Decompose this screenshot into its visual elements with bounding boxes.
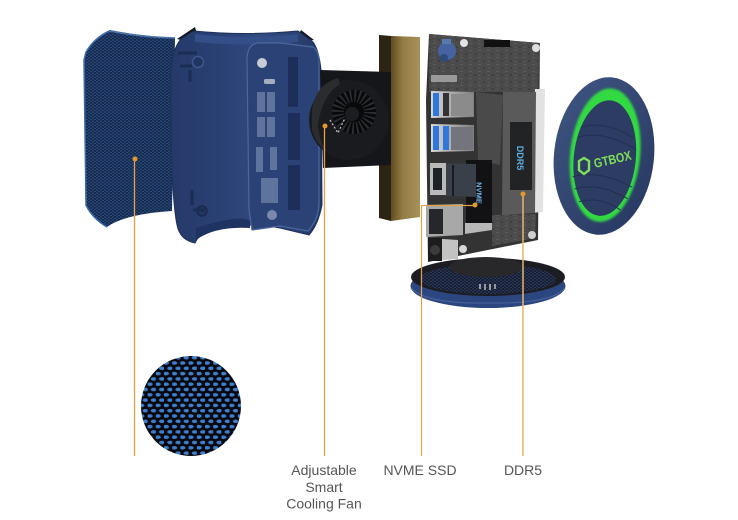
base puck [410,257,566,308]
front LED disc with logo [546,72,662,240]
label: DDR5: DDR5 [504,462,542,478]
power jack [428,238,458,261]
ethernet port [426,204,463,237]
label: Adjustable Smart Cooling Fan: Smart [305,479,343,495]
label: Adjustable Smart Cooling Fan: Cooling Fan [286,496,362,512]
USB ports [431,91,474,152]
heatsink [379,35,420,221]
stacked port [430,163,476,197]
label: Adjustable Smart Cooling Fan: Adjustable [291,462,357,478]
NVMe SSD: NVME [474,182,484,204]
mesh texture swatch [141,356,241,456]
CMOS battery screw [438,39,456,62]
leader line: DDR5 [520,192,526,456]
leader line: cooling fan [322,124,328,456]
leader line: mesh cover [132,156,138,456]
DDR5 memory module: DDR5 [515,146,525,170]
GTBOX logo [579,148,633,174]
inner shell with I/O bracket [171,27,322,243]
I/O bracket plate [247,43,319,231]
DDR5 memory module [502,89,545,215]
GTBOX logo: GTBOX [592,148,633,171]
NVMe SSD [465,160,492,234]
blower cooling fan [309,70,391,168]
label: NVME SSD: NVME SSD [383,462,457,478]
mesh outer cover [84,30,175,227]
leader line: NVME SSD [422,202,478,456]
mainboard [426,34,540,262]
